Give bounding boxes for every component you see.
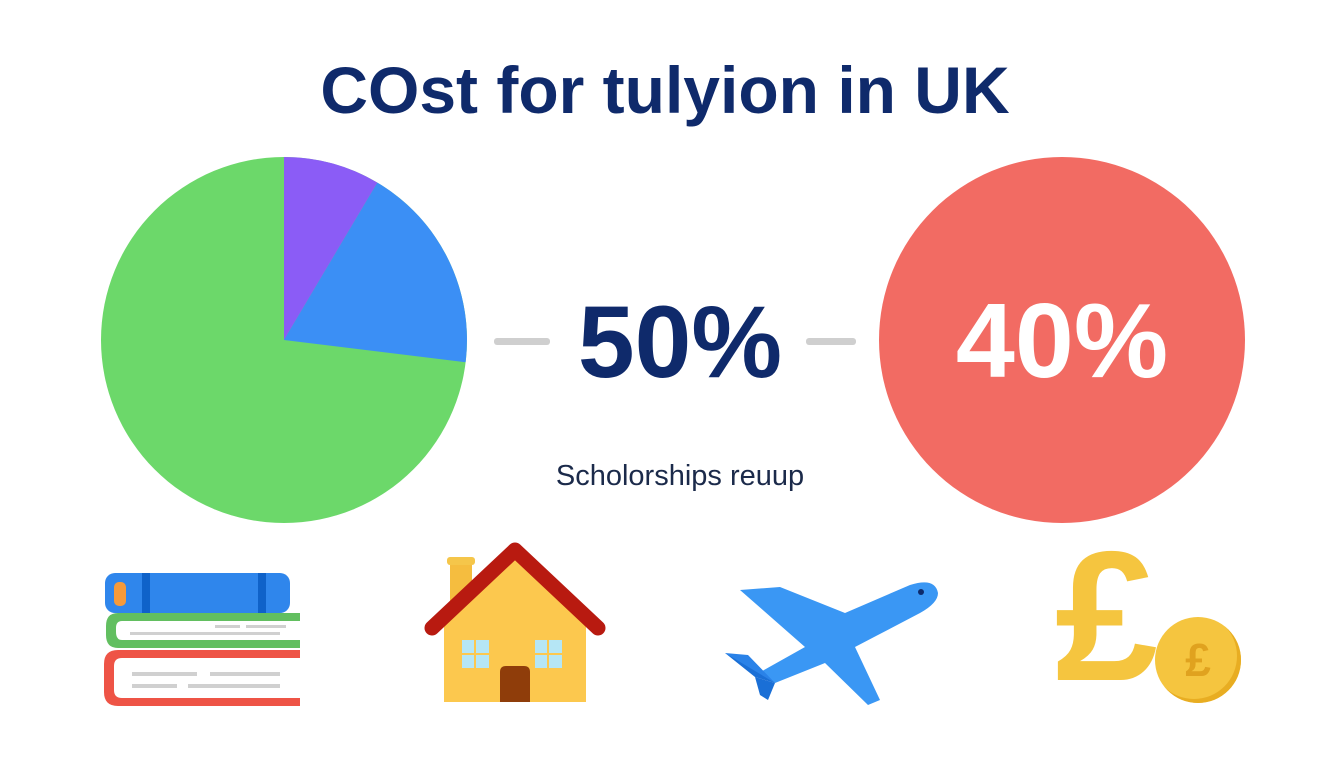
red circle 40% xyxy=(879,157,1245,523)
caption: Scholorships reuup xyxy=(556,460,804,492)
value 40%: 40% xyxy=(956,282,1168,400)
coin xyxy=(1155,617,1241,703)
dash left xyxy=(494,338,550,345)
title: COst for tulyion in UK xyxy=(320,53,1010,127)
icon: pound sign and coin xyxy=(1055,514,1241,720)
pound symbol: £ xyxy=(1055,514,1158,720)
icon: airplane xyxy=(725,582,938,705)
value 50%: 50% xyxy=(578,285,782,399)
coin: £ xyxy=(1185,634,1211,686)
dash right xyxy=(806,338,856,345)
icon: house xyxy=(424,542,606,702)
icon: books xyxy=(104,573,300,706)
pie chart xyxy=(101,157,467,523)
